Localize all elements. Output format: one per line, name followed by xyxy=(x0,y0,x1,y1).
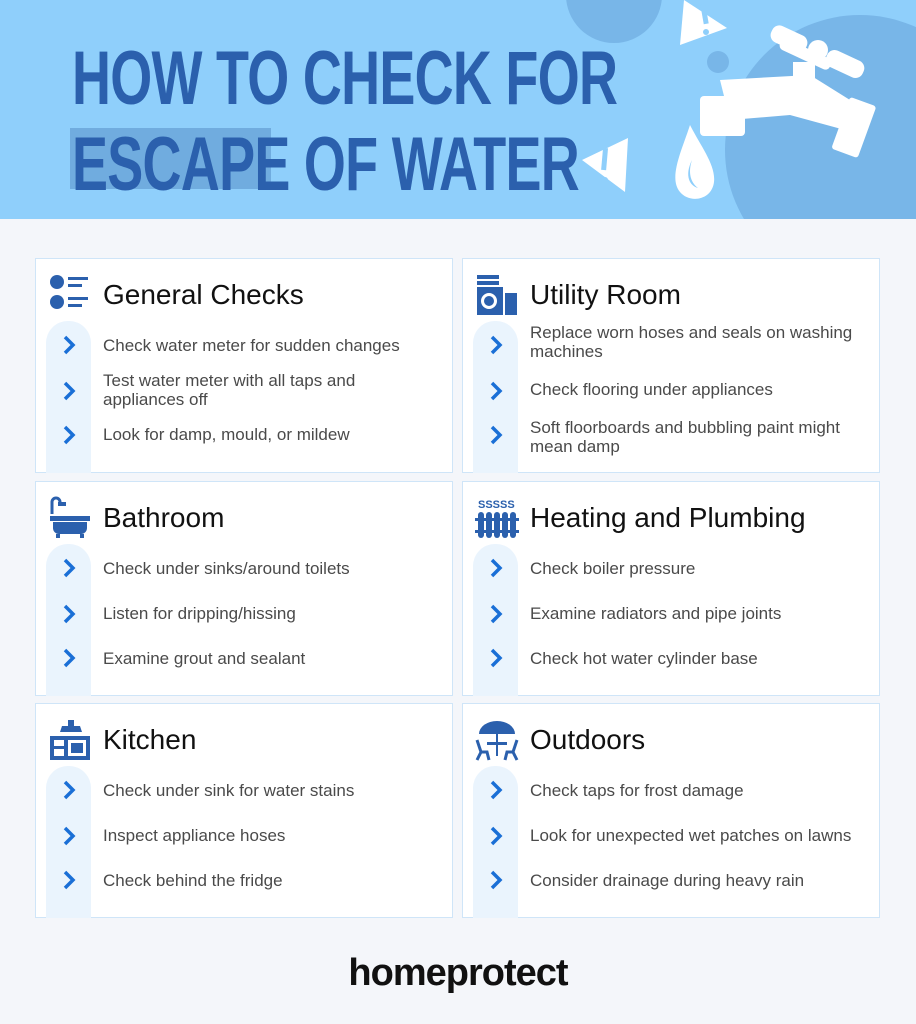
panel: Outdoors: Check taps for frost damage xyxy=(530,781,744,800)
panel: Outdoors xyxy=(462,703,880,918)
panel: General Checks: Check water meter for sudden changes xyxy=(103,336,400,355)
panel: General Checks xyxy=(35,258,453,473)
panel: Outdoors: Look for unexpected wet patches on lawns xyxy=(530,826,851,845)
logo: homeprotect xyxy=(348,952,568,994)
icon: kitchen xyxy=(50,720,90,760)
panel: General Checks: Look for damp, mould, or mildew xyxy=(103,425,350,444)
icon: patio umbrella xyxy=(476,721,518,761)
heading: Outdoors xyxy=(530,724,645,755)
icon: bathtub xyxy=(50,496,90,538)
panel: Heating and Plumbing: Examine radiators and pipe joints xyxy=(530,604,781,623)
panel: Heating and Plumbing: Check hot water cylinder base xyxy=(530,649,758,668)
panel: Kitchen: Check behind the fridge xyxy=(103,871,283,890)
heading: Heating and Plumbing xyxy=(530,502,806,533)
panel: Bathroom: Listen for dripping/hissing xyxy=(103,604,296,623)
title xyxy=(72,36,617,207)
panel: Kitchen: Check under sink for water stains xyxy=(103,781,354,800)
heading: Bathroom xyxy=(103,502,224,533)
panel: Bathroom xyxy=(35,481,453,696)
panel: General Checks: Test water meter with all taps and appliances off xyxy=(103,371,355,409)
title: ESCAPE OF WATER xyxy=(72,122,579,207)
heading: Kitchen xyxy=(103,724,196,755)
icon: radiator: SSSSS xyxy=(478,499,515,511)
icon: checklist xyxy=(50,275,88,309)
panel: Bathroom: Check under sinks/around toilets xyxy=(103,559,350,578)
panel: Kitchen: Inspect appliance hoses xyxy=(103,826,285,845)
icon: washing machine xyxy=(477,275,517,315)
panel: Utility Room: Soft floorboards and bubbling paint might mean damp xyxy=(530,418,840,456)
header banner xyxy=(0,0,916,219)
panel: Heating and Plumbing xyxy=(462,481,880,696)
title: HOW TO CHECK FOR xyxy=(72,36,617,121)
panel: Heating and Plumbing: Check boiler pressure xyxy=(530,559,695,578)
heading: General Checks xyxy=(103,279,304,310)
icon: radiator xyxy=(475,499,519,538)
panel: Utility Room: Replace worn hoses and seals on washing machines xyxy=(530,323,852,361)
panel: Utility Room: Check flooring under appliances xyxy=(530,380,773,399)
panel: Utility Room xyxy=(462,258,880,473)
heading: Utility Room xyxy=(530,279,681,310)
panel: Kitchen xyxy=(35,703,453,918)
panel: Bathroom: Examine grout and sealant xyxy=(103,649,305,668)
panel: Outdoors: Consider drainage during heavy rain xyxy=(530,871,804,890)
